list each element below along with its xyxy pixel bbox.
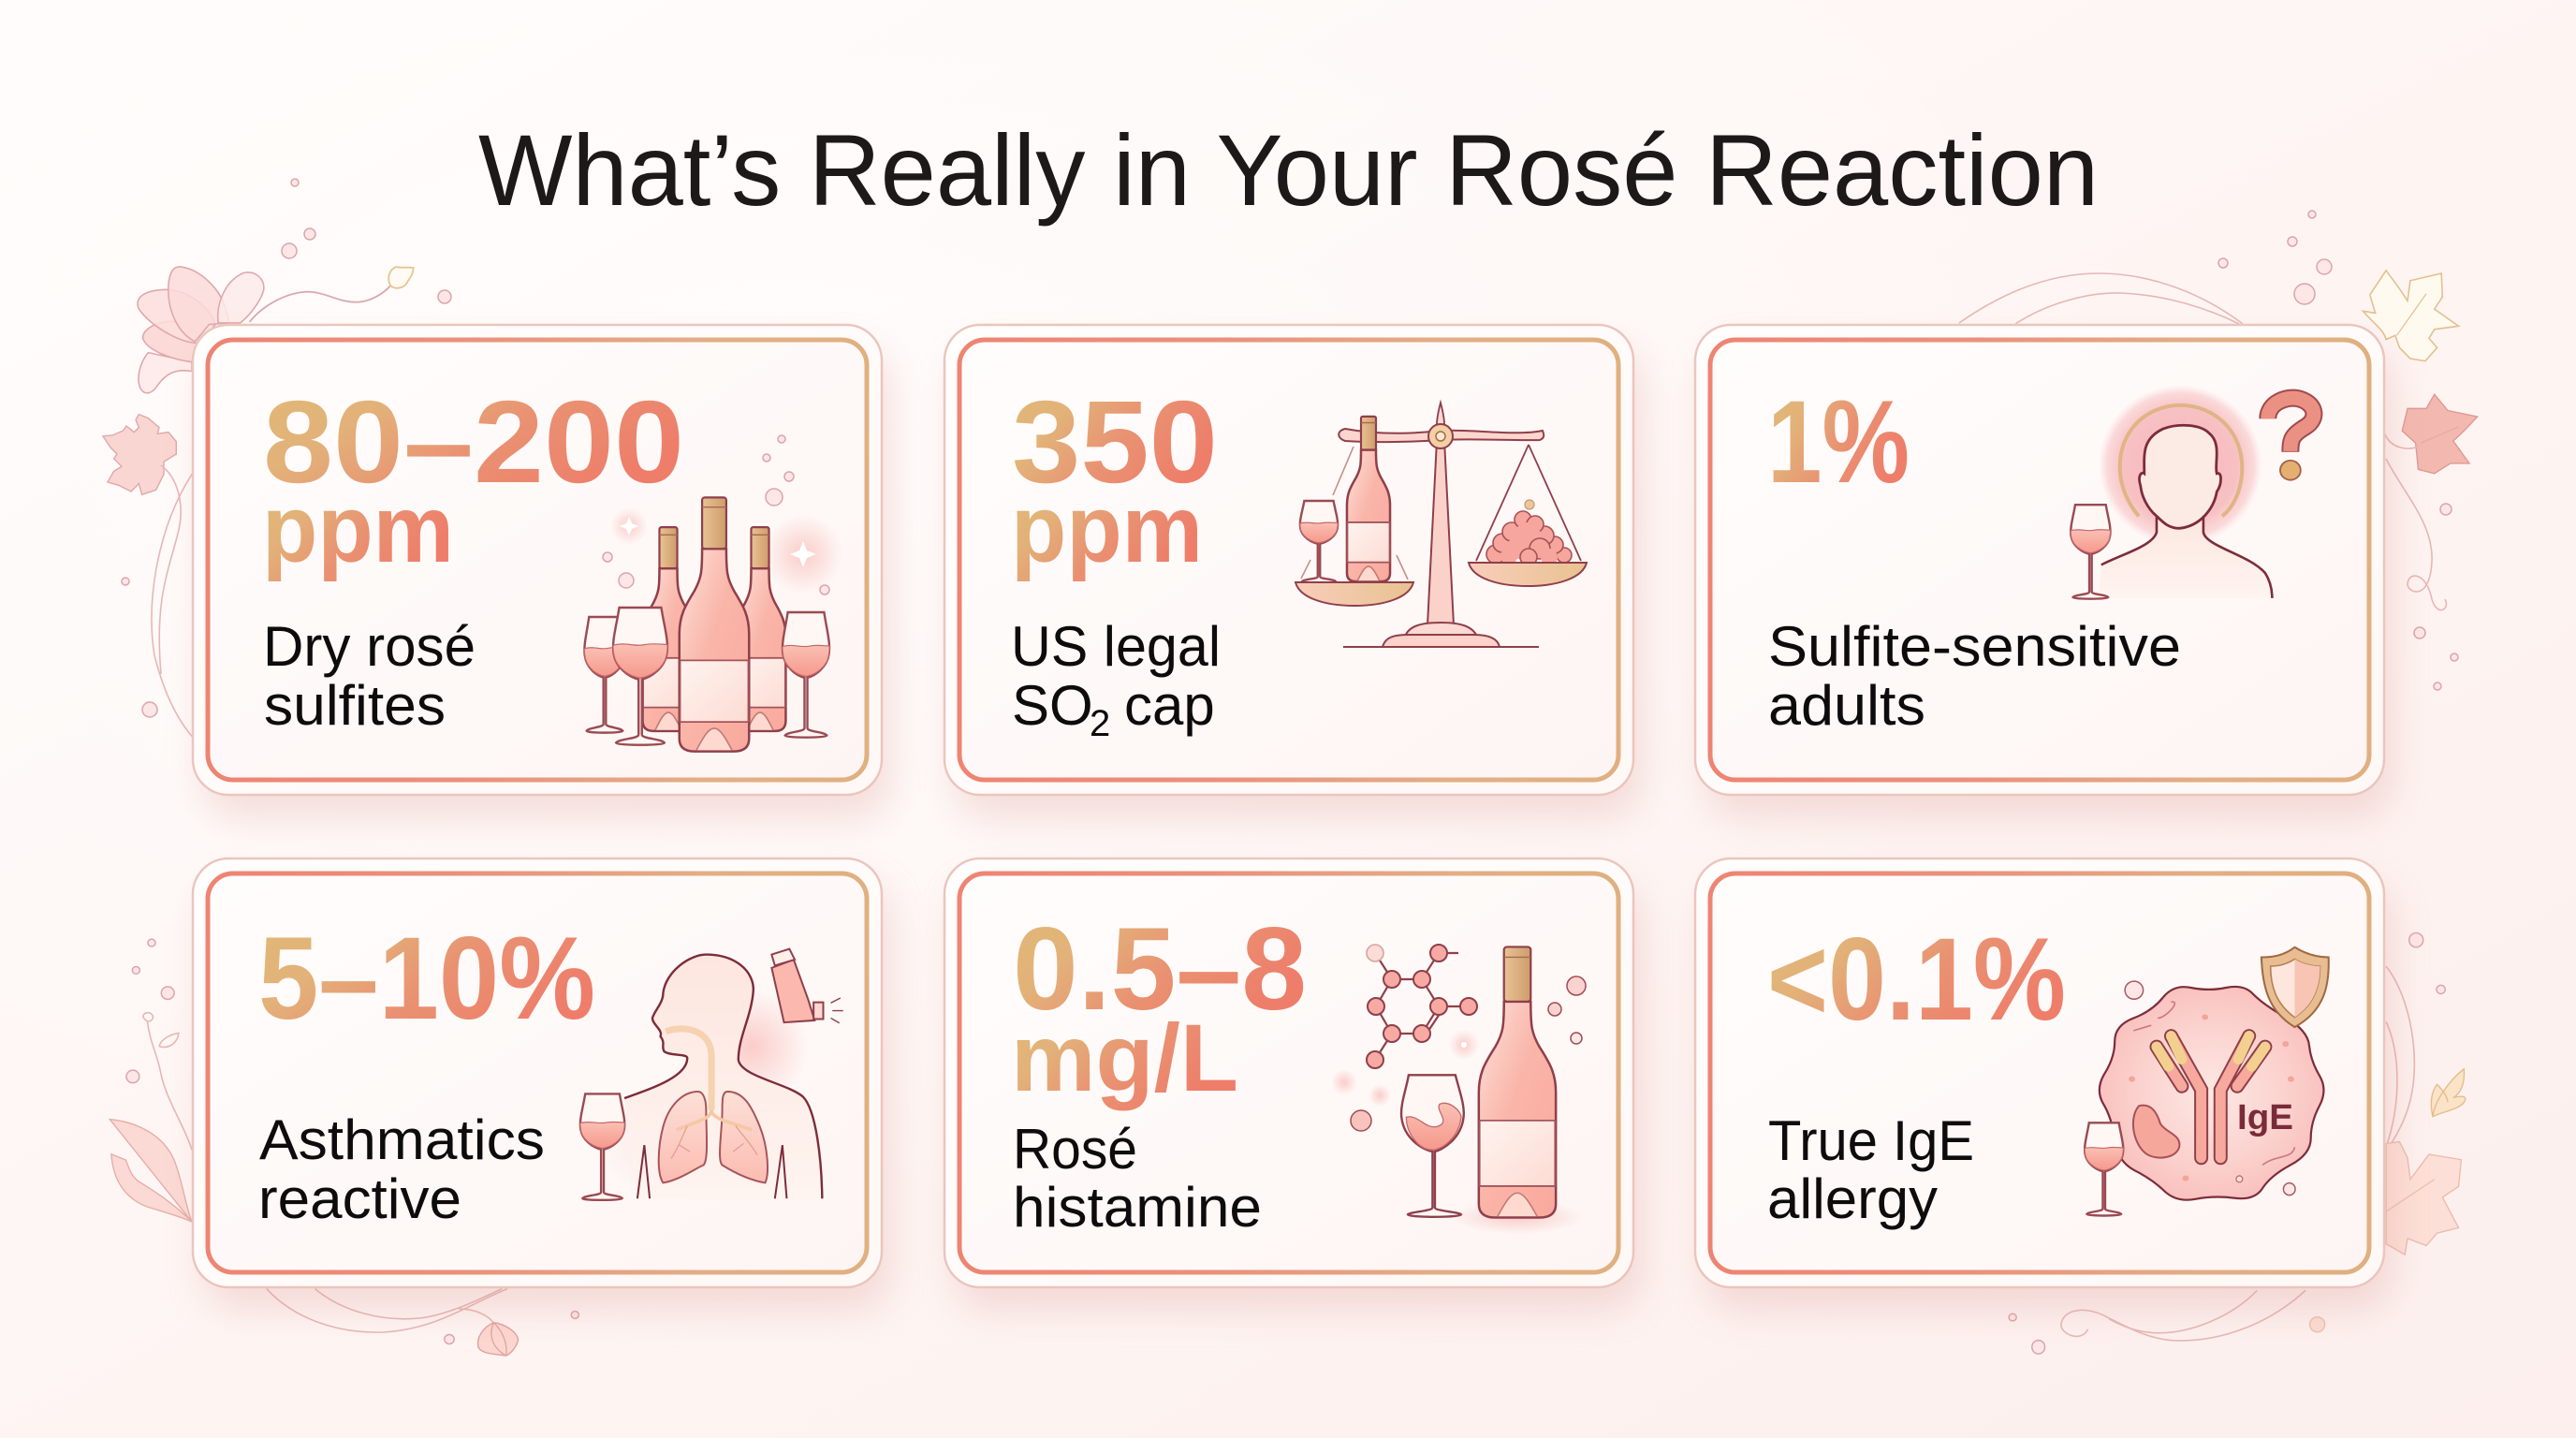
label: asthmatics reactive bbox=[258, 1108, 545, 1230]
label: rosé histamine bbox=[1013, 1118, 1262, 1239]
unit: ppm: ppm bbox=[1011, 476, 1203, 582]
label: asthmatics reactive: reactive bbox=[258, 1167, 461, 1230]
icon: balance scale with bottle and sulfite pile bbox=[1295, 403, 1587, 647]
title: What’s Really in Your Rosé Reaction bbox=[478, 113, 2099, 227]
icon label: IgE: IgE bbox=[2237, 1098, 2293, 1137]
stat: 0.5–8: 0.5–8 bbox=[1013, 904, 1307, 1034]
label: US legal SO2 cap: US legal bbox=[1011, 615, 1221, 678]
label: true IgE allergy bbox=[1767, 1109, 1974, 1230]
panel: US legal SO2 cap bbox=[944, 325, 1643, 818]
label: true IgE allergy: True IgE bbox=[1768, 1109, 1974, 1172]
icon: histamine molecule, swirling glass and bottle bbox=[1331, 945, 1586, 1234]
decoration: bubbles top left bbox=[122, 179, 451, 717]
unit: ppm: ppm bbox=[262, 476, 454, 582]
label: US legal SO2 cap: 2 bbox=[1090, 703, 1110, 744]
label: true IgE allergy: allergy bbox=[1767, 1167, 1938, 1230]
label: US legal SO2 cap: SO bbox=[1012, 674, 1093, 737]
icon: IgE antibody in allergen blob with shield bbox=[2085, 947, 2329, 1216]
label: asthmatics reactive: Asthmatics bbox=[259, 1108, 545, 1171]
panel: asthmatics reactive bbox=[193, 858, 891, 1311]
decoration: lower-left leaf, vine and bubbles bbox=[110, 939, 192, 1222]
stat: <0.1%: <0.1% bbox=[1767, 915, 2066, 1045]
label: US legal SO2 cap bbox=[1011, 615, 1221, 744]
unit: mg/L: mg/L bbox=[1011, 1005, 1238, 1111]
stat: 350: 350 bbox=[1012, 377, 1218, 507]
decoration: top-right leaves, arcs, vine and bubbles bbox=[1959, 211, 2478, 690]
decoration: bottom-left curves and tulip bbox=[267, 1289, 578, 1356]
decoration: left grape leaf and tendril arcs bbox=[103, 415, 195, 740]
stat: 80–200: 80–200 bbox=[263, 377, 684, 507]
label: rosé histamine: Rosé bbox=[1013, 1118, 1137, 1181]
icon: respiratory system and inhaler bbox=[580, 949, 843, 1200]
label: dry rosé sulfites: sulfites bbox=[264, 674, 446, 737]
decoration: lower-right arcs, leaves, curls and bubbles bbox=[2009, 932, 2466, 1354]
stat: 5–10%: 5–10% bbox=[258, 914, 595, 1044]
panel: sulfite-sensitive adults bbox=[1695, 325, 2393, 818]
label: US legal SO2 cap: cap bbox=[1124, 674, 1215, 737]
icon: rosé bottles and glasses bbox=[584, 435, 842, 752]
label: sulfite-sensitive adults: Sulfite-sensitive bbox=[1768, 615, 2181, 678]
label: rosé histamine: histamine bbox=[1013, 1176, 1262, 1239]
panel: rosé histamine bbox=[944, 858, 1643, 1311]
panel: true IgE allergy bbox=[1695, 858, 2393, 1311]
label: sulfite-sensitive adults: adults bbox=[1768, 674, 1925, 737]
label: dry rosé sulfites: Dry rosé bbox=[263, 615, 476, 678]
label: dry rosé sulfites bbox=[263, 615, 476, 737]
icon: person with halo, glass and question mark bbox=[2071, 385, 2314, 599]
stat: 1%: 1% bbox=[1767, 377, 1910, 507]
panel: dry rosé sulfites bbox=[193, 325, 891, 818]
label: sulfite-sensitive adults bbox=[1768, 615, 2181, 737]
decoration: top-left flower and vine bbox=[138, 267, 414, 393]
